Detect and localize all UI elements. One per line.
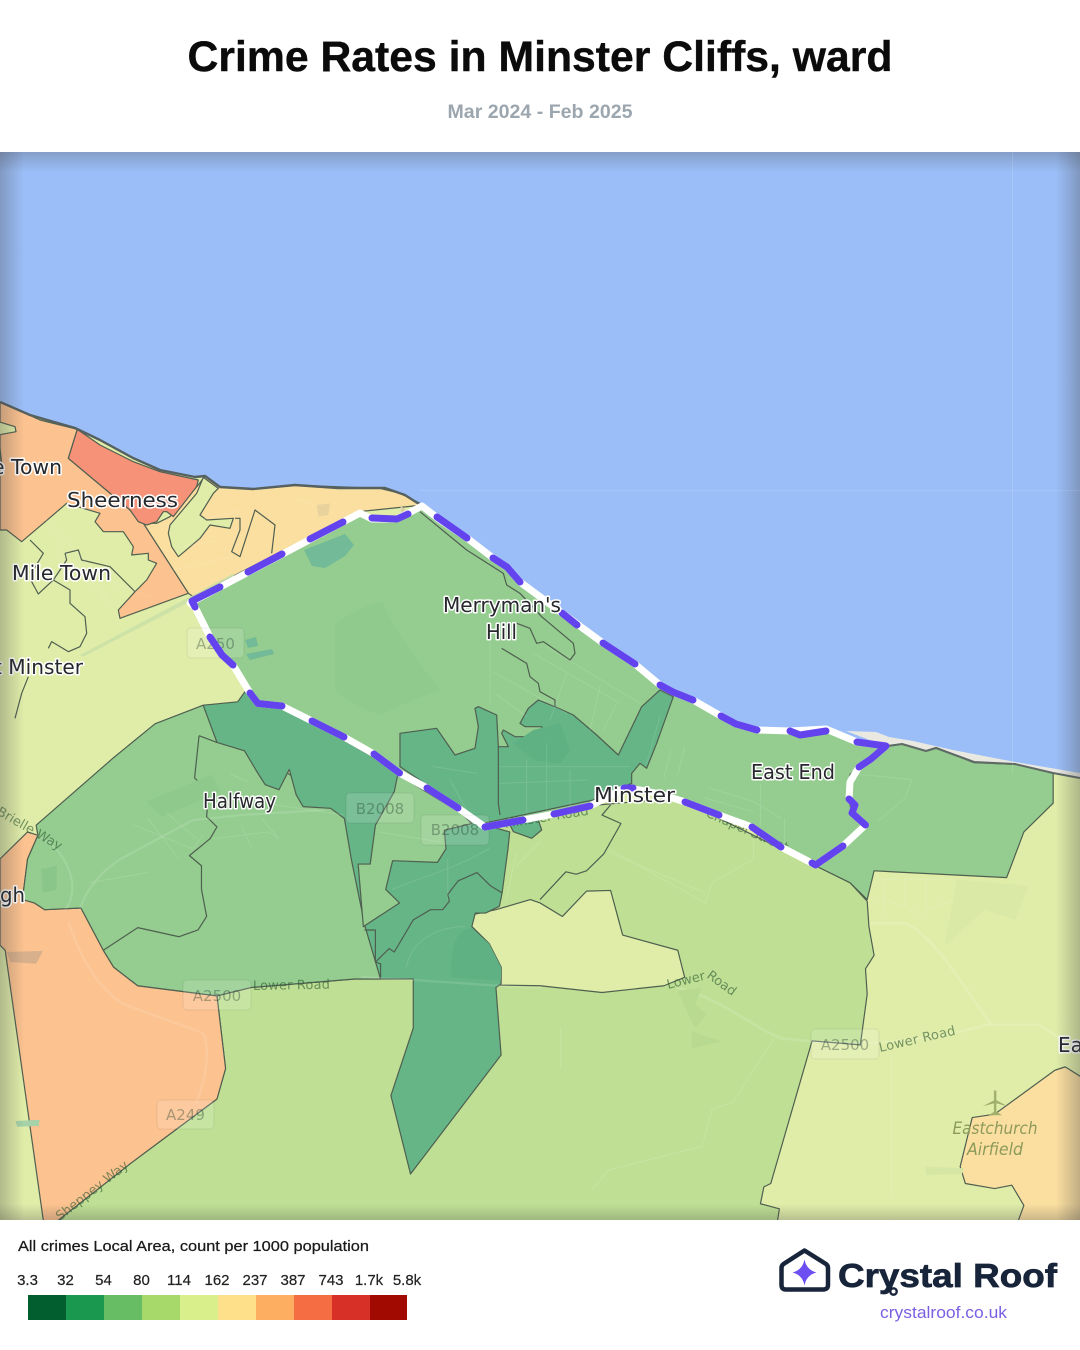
- legend values: 54: [95, 1272, 112, 1289]
- legend: [17, 1238, 422, 1320]
- airfield label: [952, 1119, 1038, 1160]
- area: pale island Sheerness: [168, 477, 233, 557]
- place: Mile Town: Mile Town: [12, 561, 111, 585]
- area: dark green central: [203, 690, 510, 1174]
- area: pale green island: [472, 890, 685, 993]
- shield: A250: A250: [196, 635, 235, 653]
- icon: house with star: [782, 1250, 828, 1290]
- Sheerness areas: [0, 402, 423, 718]
- road name: Sheppey Way: Sheppey Way: [53, 1158, 132, 1224]
- area: peach Eastchurch: [960, 1067, 1080, 1224]
- subtitle: date range: Mar 2024 - Feb 2025: [448, 102, 633, 123]
- shield: B2008 upper: B2008: [356, 800, 404, 818]
- airfield label: Airfield: [966, 1140, 1023, 1160]
- road labels: [0, 804, 957, 1224]
- sea: [0, 152, 1080, 773]
- legend values: 743: [318, 1272, 344, 1289]
- website: crystalroof.co.uk: [880, 1304, 1008, 1322]
- place: Halfway west: gh: [0, 883, 25, 907]
- legend values: 1.7k: [355, 1272, 384, 1289]
- shield: B2008 lower: B2008: [431, 821, 479, 839]
- road number shields: [157, 628, 879, 1129]
- place labels: [0, 455, 1080, 1057]
- legend title: All crimes Local Area, count per 1000 population: [18, 1238, 369, 1255]
- area: mid green south: [45, 798, 874, 1231]
- small water patch: [15, 1120, 40, 1127]
- map: [0, 152, 1080, 1231]
- legend values: [17, 1272, 422, 1289]
- legend values: 3.3: [17, 1272, 38, 1289]
- road name: Lower Road west: Lower Road: [253, 978, 330, 994]
- legend values: 5.8k: [393, 1272, 422, 1289]
- area: orange south-west: [0, 832, 226, 1231]
- legend values: 80: [133, 1272, 150, 1289]
- shield: B2008 upper: [346, 793, 414, 823]
- area: East End green: [561, 744, 1080, 1224]
- place: Halfway: Halfway: [203, 789, 276, 813]
- area: lighter island in dark green: [358, 774, 472, 927]
- shield: B2008 lower: [421, 815, 489, 845]
- ponds: [245, 534, 354, 660]
- roads west: [38, 810, 541, 1102]
- land base: pale green: [0, 402, 1080, 1225]
- ward boundary: white line: [190, 506, 886, 865]
- area: dark green Minster: [400, 512, 673, 838]
- legend values: 237: [242, 1272, 268, 1289]
- legend values: 387: [280, 1272, 306, 1289]
- place: East End: East End: [751, 760, 835, 784]
- place: Sheerness: Sheerness: [67, 488, 178, 512]
- estuary patch in orange: [7, 951, 43, 964]
- area: orange Sheerness: [0, 402, 188, 618]
- wordmark: Crystal Roof: [838, 1257, 1058, 1294]
- area: pale island north-west: [0, 422, 16, 435]
- place: Minster: Minster: [594, 783, 676, 807]
- shield: A2500 east: A2500: [821, 1036, 869, 1054]
- road name: Lower Road east: Lower Road: [878, 1024, 957, 1056]
- choropleth areas west and south: [0, 690, 874, 1231]
- road name: Chapel Street: Chapel Street: [703, 806, 791, 856]
- area: Minster Cliffs ward: [190, 506, 886, 865]
- icon: airport plane: [983, 1091, 1008, 1115]
- legend colour scale: [28, 1295, 407, 1320]
- legend values: 162: [204, 1272, 230, 1289]
- area: Halfway green: [22, 705, 381, 996]
- main road A2500: [678, 923, 1080, 1052]
- road name: Minster Road: Minster Road: [503, 804, 590, 832]
- shield: A2500 east: [811, 1029, 879, 1059]
- road name: Road bend: Road: [704, 968, 739, 999]
- darker patch: [480, 935, 502, 981]
- place: Merryman's Hill: Hill: [486, 620, 517, 644]
- ward boundary: purple dashes: [192, 514, 886, 865]
- airfield label: Eastchurch: [952, 1119, 1038, 1139]
- shield: A2500 west: A2500: [193, 987, 241, 1005]
- logo: Crystal Roof: [782, 1250, 1058, 1322]
- shield: A249: [157, 1100, 214, 1129]
- coastline: [0, 402, 422, 506]
- map edge shading: [0, 152, 1080, 1220]
- boundary in mid green near Minster: [540, 805, 621, 900]
- coastline east: [888, 744, 1080, 778]
- shield: A249: A249: [166, 1106, 205, 1124]
- road name: Lower Road centre: Lower: [665, 969, 707, 993]
- title: Crime Rates in Minster Cliffs, ward: [188, 33, 892, 81]
- shield: A250: [187, 628, 244, 658]
- shield: A2500 west: [183, 980, 251, 1010]
- legend values: 32: [57, 1272, 74, 1289]
- darker parkland patch: [335, 602, 440, 715]
- area: peach Sheerness east: [143, 476, 423, 597]
- place: Merryman's Hill: Merryman's: [443, 593, 561, 617]
- place: Merryman's Hill: [443, 593, 561, 644]
- beach strip east: [846, 731, 1080, 778]
- area: red Sheerness north: [68, 429, 198, 525]
- legend values: 114: [167, 1272, 191, 1289]
